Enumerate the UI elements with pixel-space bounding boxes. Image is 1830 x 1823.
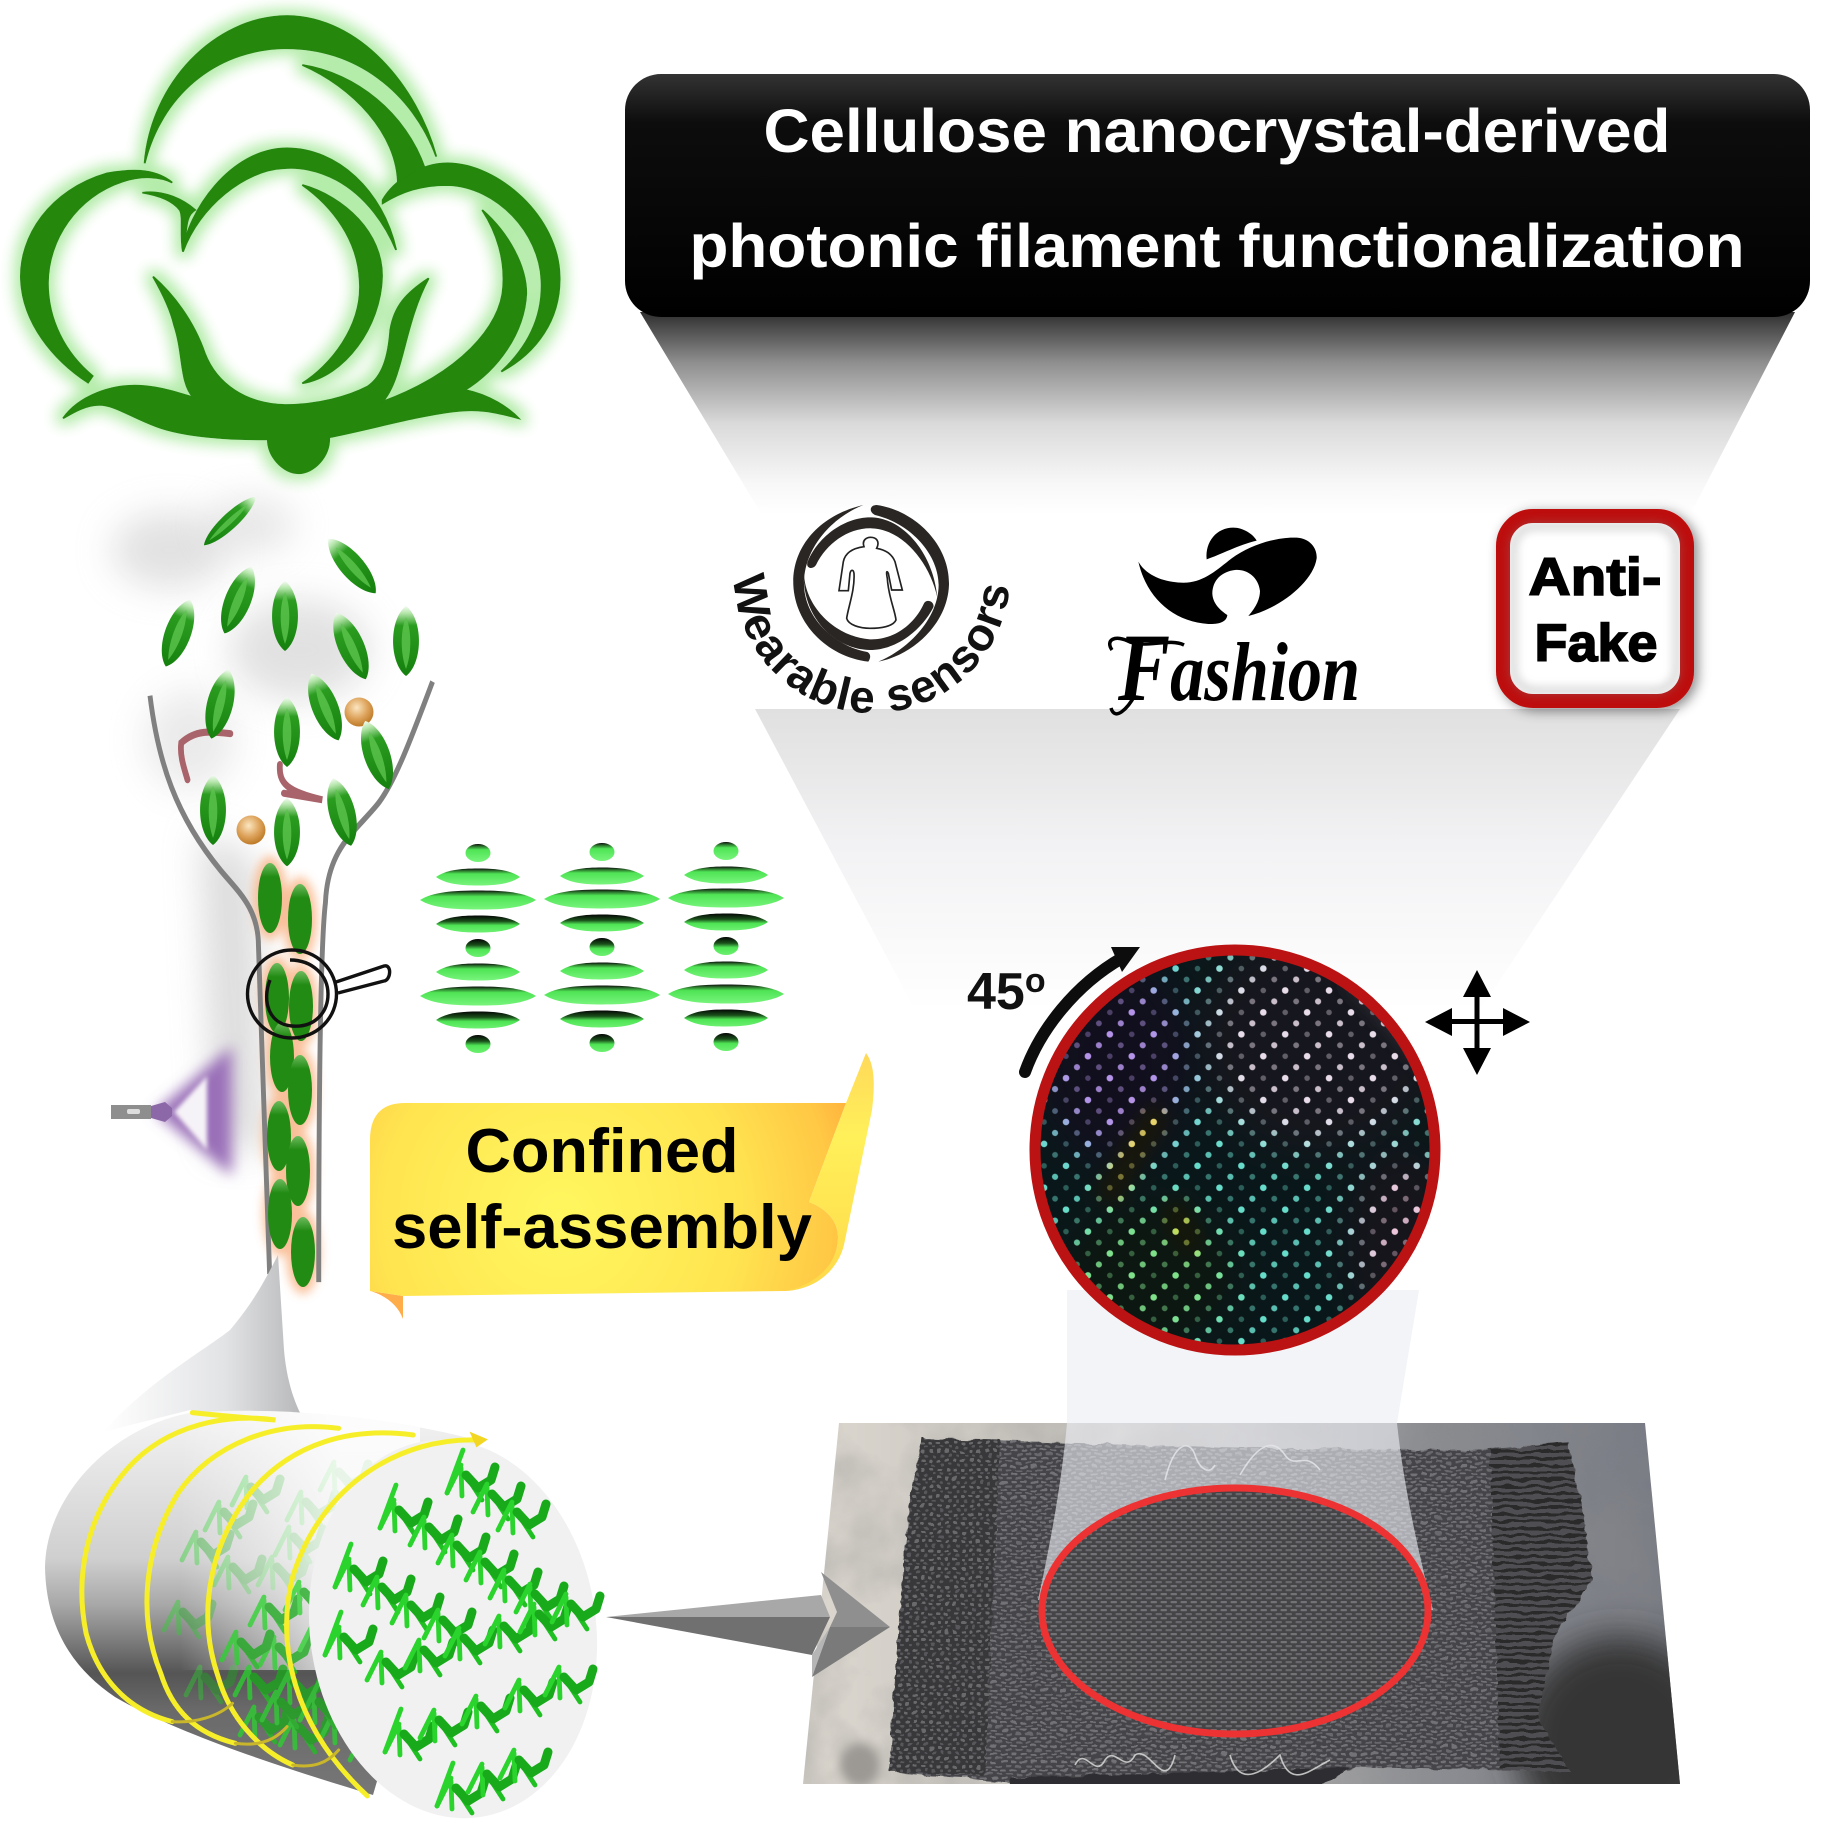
callout: confined self-assembly banner (370, 1053, 874, 1319)
icon: coat (839, 537, 902, 628)
cylinder body (45, 1411, 476, 1795)
callout: confined self-assembly banner: self-assembly (392, 1193, 813, 1262)
impurities: brown polymer strands and orange particles (181, 698, 374, 844)
icon: UV flashlight with purple beam (111, 1046, 232, 1176)
icon: wearable sensors badge (734, 505, 1009, 713)
cross-section disc (285, 1421, 621, 1823)
woven fabric photo (803, 1423, 1680, 1784)
red ellipse highlighting fabric area (1042, 1488, 1428, 1734)
icon: cotton boll logo (21, 16, 560, 473)
grey funnel connecting tube to filament (103, 1255, 307, 1432)
callout: confined self-assembly banner: Confined (466, 1117, 738, 1186)
zoomed photonic fabric disc (1030, 930, 1450, 1355)
free cellulose nanocrystals (154, 491, 419, 866)
confined nanocrystals in tube (258, 863, 315, 1287)
anti-fake stamp: Anti- (1528, 548, 1662, 607)
curved rotation arrow with 45 degree label: o (1025, 962, 1046, 1000)
gradient band under application icons (755, 709, 1680, 1010)
curved rotation arrow with 45 degree label: 45 (967, 963, 1025, 1021)
helical green rods on cross-section (325, 1450, 600, 1813)
soft grey shadows behind nanocrystals and tube (112, 497, 370, 1150)
icon: wearable sensors badge: Wearable sensors (734, 572, 1009, 713)
title banner: Cellulose nanocrystal-derived (764, 97, 1670, 165)
title banner: photonic filament functionalization (690, 212, 1744, 280)
translucent green helicoid inside cylinder (164, 1410, 420, 1767)
title banner (625, 74, 1810, 317)
microfluidic tube with orange confined region (150, 682, 433, 1294)
icon: fashion hat logo with script label: Fashion (1117, 614, 1360, 721)
icon: magnifying glass (248, 950, 390, 1038)
translucent light beam from zoom circle to fabric (1038, 1290, 1433, 1610)
icon: fashion hat logo with script label (1110, 528, 1360, 721)
anti-fake stamp (1503, 516, 1687, 701)
gradient band under title (640, 312, 1795, 515)
anti-fake stamp: Fake (1534, 614, 1658, 673)
yellow helix wire (82, 1413, 488, 1796)
curved rotation arrow with 45 degree label (967, 947, 1140, 1072)
arrow to fabric (606, 1572, 890, 1677)
aligned chiral nematic stacks (420, 842, 784, 1053)
filament cylinder with helical structure (45, 1410, 621, 1823)
icon: polarizer cross arrows (1425, 970, 1530, 1075)
